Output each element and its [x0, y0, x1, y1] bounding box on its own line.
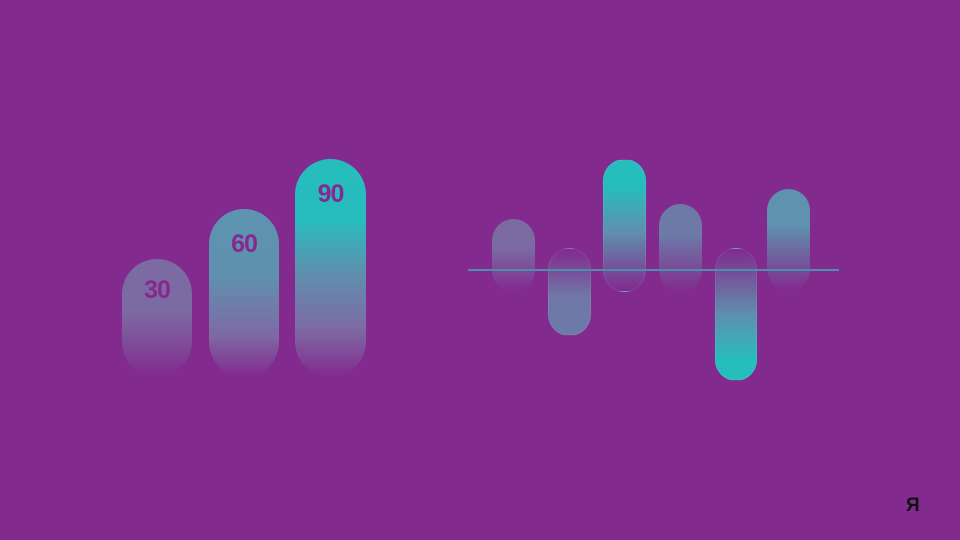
left chart: bar 90	[295, 159, 366, 377]
label 90: 90	[318, 180, 343, 208]
baseline	[468, 269, 839, 271]
left chart: bar 30	[122, 259, 192, 377]
bar 5	[715, 248, 757, 381]
bar 4	[659, 204, 702, 292]
bar 6	[767, 189, 810, 291]
label 30: 30	[144, 276, 170, 304]
bar 3	[603, 159, 646, 292]
bar 1	[492, 219, 535, 292]
label 60: 60	[231, 230, 257, 258]
right chart	[468, 159, 839, 381]
logo: Я	[906, 495, 920, 516]
bar 2	[548, 248, 591, 336]
left chart: bar 60	[209, 209, 279, 377]
